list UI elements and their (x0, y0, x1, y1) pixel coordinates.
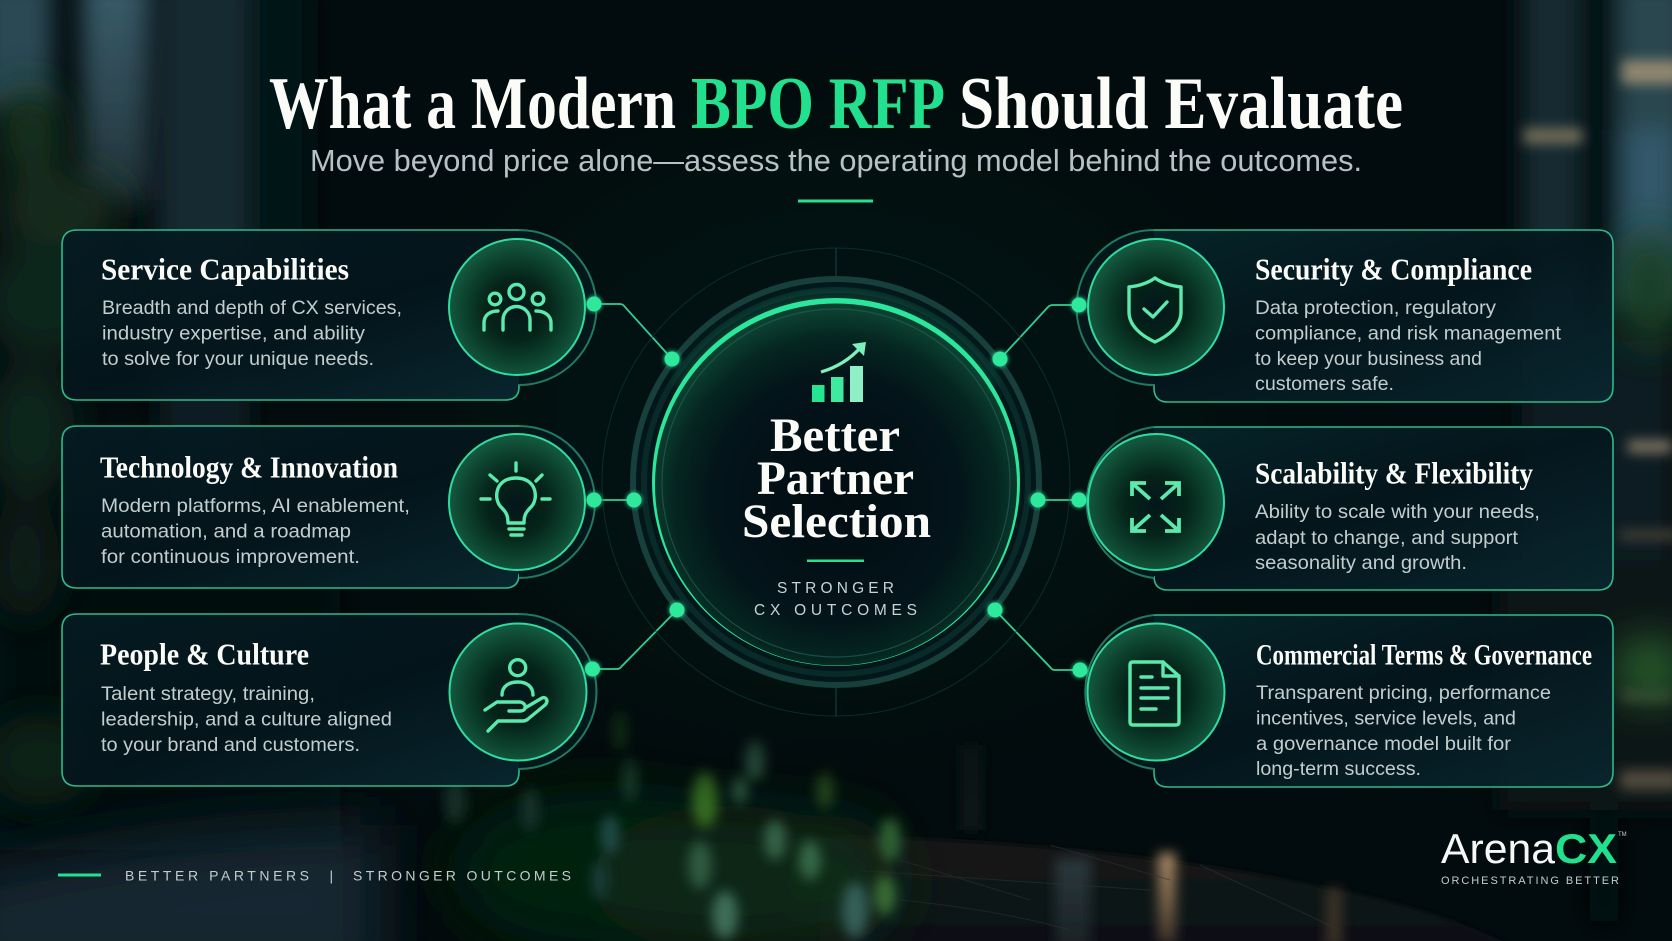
heading: People & Culture (100, 636, 309, 672)
description: Transparent pricing, performance (1256, 682, 1551, 704)
description: industry expertise, and ability (102, 322, 365, 344)
hub tagline: CX OUTCOMES (754, 602, 917, 619)
heading: Security & Compliance (1255, 252, 1532, 286)
icon: hand holding person (485, 660, 547, 731)
connector lines (592, 304, 1080, 670)
footer tagline: BETTER PARTNERS (125, 868, 309, 884)
description (1256, 682, 1551, 780)
title: What a Modern (269, 63, 676, 145)
description: Breadth and depth of CX services, (102, 297, 402, 319)
icon: growth chart (812, 342, 866, 402)
description (101, 495, 410, 568)
hub tagline (754, 580, 917, 619)
description (101, 683, 392, 756)
title divider (798, 200, 873, 202)
description: to keep your business and (1255, 348, 1482, 370)
hub heading: Better (770, 409, 900, 462)
description: automation, and a roadmap (101, 520, 351, 542)
description: incentives, service levels, and (1256, 708, 1516, 730)
icon: light bulb (481, 463, 550, 535)
logo: ArenaCX: Arena (1441, 825, 1556, 872)
description: Ability to scale with your needs, (1255, 501, 1540, 523)
description (1255, 297, 1562, 395)
footer tagline (58, 868, 571, 884)
hub heading: Selection (742, 495, 931, 548)
title (269, 63, 1403, 145)
description: seasonality and growth. (1255, 552, 1467, 574)
panel: scalability and flexibility (1087, 427, 1613, 590)
panel: service capabilities (62, 230, 596, 400)
panel: security and compliance (1076, 230, 1613, 402)
description: to solve for your unique needs. (102, 348, 374, 370)
hub tagline: STRONGER (777, 580, 894, 597)
logo: ArenaCX: CX (1555, 825, 1617, 872)
description: for continuous improvement. (101, 546, 360, 568)
footer tagline: | (330, 868, 333, 884)
main ring (652, 298, 1020, 666)
description: compliance, and risk management (1255, 322, 1562, 344)
description: Modern platforms, AI enablement, (101, 495, 410, 517)
description: Data protection, regulatory (1255, 297, 1496, 319)
icon: document (1130, 662, 1179, 725)
icon: people (484, 284, 551, 330)
description: a governance model built for (1256, 733, 1512, 755)
icon: expand arrows (1132, 483, 1179, 531)
panel: commercial terms and governance (1085, 615, 1613, 787)
description: leadership, and a culture aligned (101, 708, 392, 730)
hub heading (742, 409, 931, 548)
connector nodes (626, 352, 1046, 618)
panel: people and culture (62, 614, 596, 786)
description: customers safe. (1255, 373, 1394, 395)
logo: ArenaCX (1441, 825, 1627, 887)
description: adapt to change, and support (1255, 527, 1519, 549)
description (1255, 501, 1540, 574)
description: to your brand and customers. (101, 734, 360, 756)
description: Talent strategy, training, (101, 683, 315, 705)
panel: technology and innovation (62, 426, 595, 588)
footer tagline: STRONGER OUTCOMES (353, 868, 571, 884)
logo: ArenaCX: ORCHESTRATING BETTER (1441, 875, 1619, 887)
logo: ArenaCX: TM (1618, 832, 1627, 838)
description (102, 297, 402, 370)
icon: shield (1129, 278, 1181, 342)
hub heading: Partner (757, 452, 914, 505)
title: Should Evaluate (959, 63, 1403, 145)
heading: Service Capabilities (101, 252, 349, 286)
title: BPO RFP (691, 63, 945, 145)
description: long-term success. (1256, 758, 1421, 780)
heading: Scalability & Flexibility (1255, 456, 1533, 490)
heading: Technology & Innovation (100, 450, 398, 484)
icon-side connector dots (585, 296, 1088, 678)
hub divider (807, 560, 864, 562)
subtitle: Move beyond price alone—assess the operating model behind the outcomes. (310, 143, 1362, 178)
center hub (602, 248, 1070, 716)
